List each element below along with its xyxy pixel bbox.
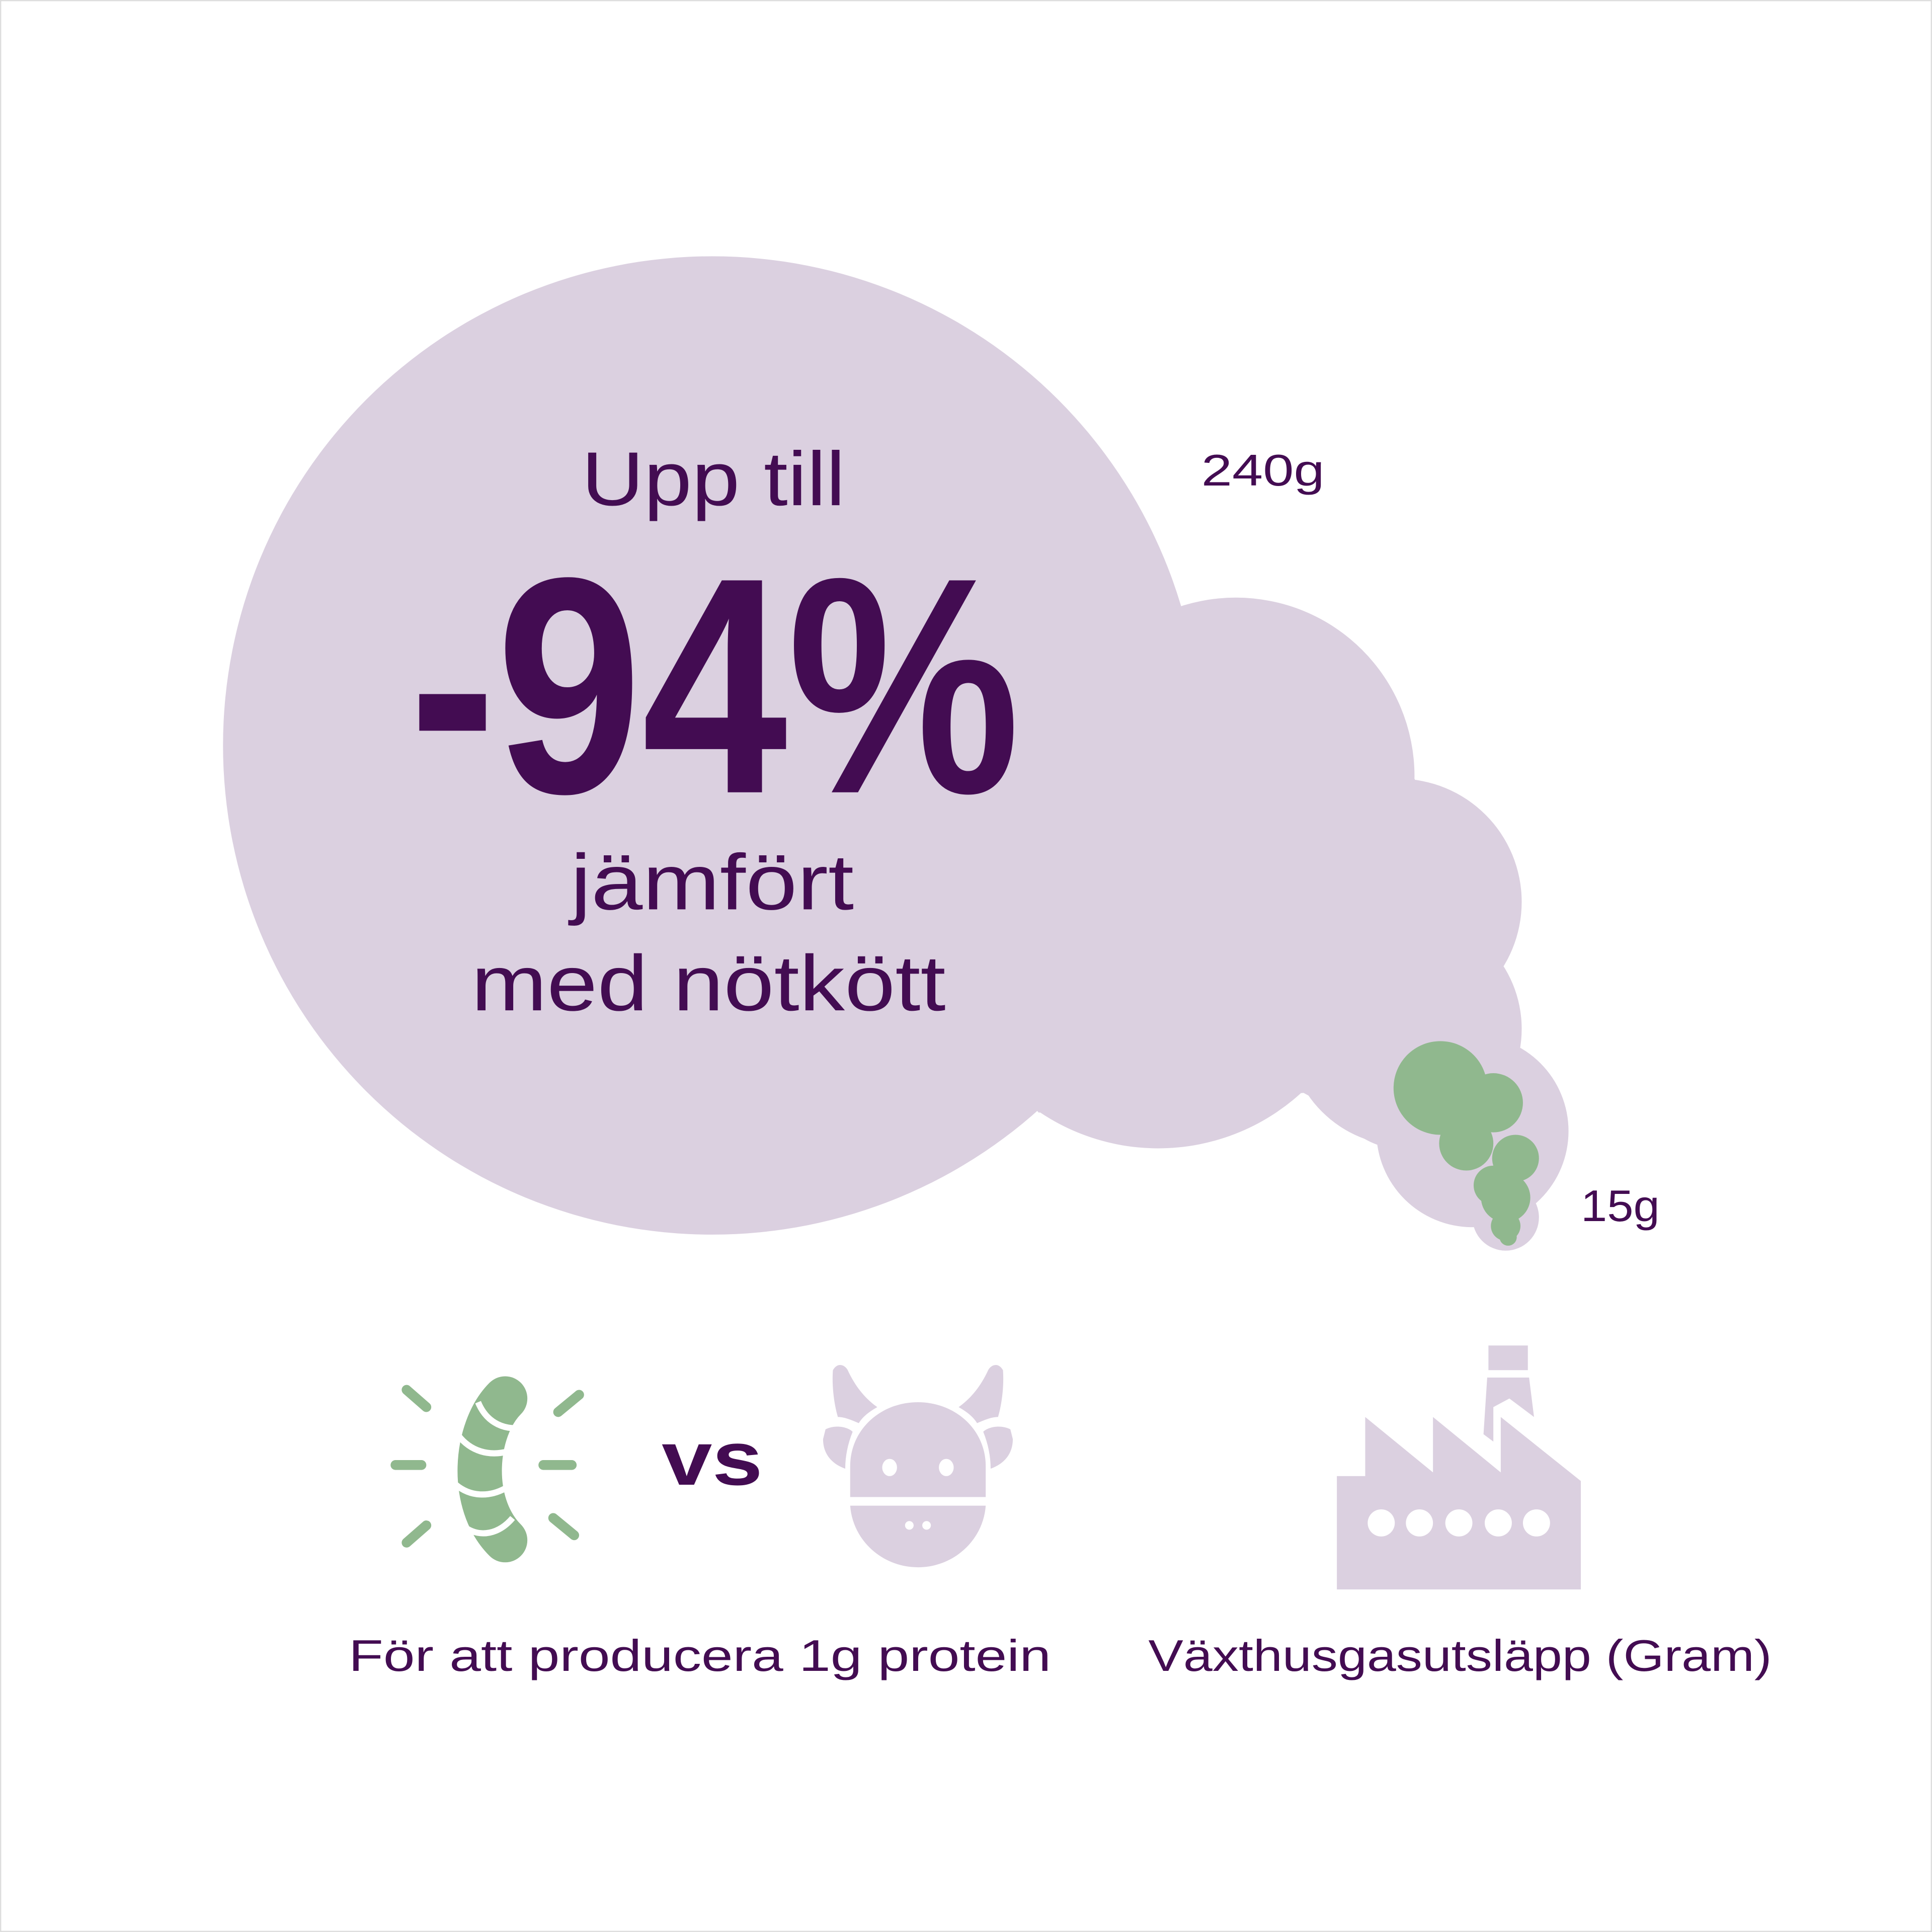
cloud shape: [223, 256, 1569, 1251]
caption: protein: För att producera 1g protein: [349, 1631, 1051, 1680]
green steam: [1394, 1041, 1539, 1246]
value 15g: 15g: [1581, 1181, 1660, 1231]
headline text: [409, 437, 1020, 1027]
headline text: jämfört: [568, 838, 854, 926]
caption: emissions: Växthusgasutsläpp (Gram): [1148, 1631, 1772, 1680]
icon: cow: [823, 1365, 1013, 1567]
headline text: -94%: [409, 514, 1020, 858]
icon: factory: [1337, 1345, 1581, 1589]
icon: larva: [395, 1390, 579, 1543]
value 240g: 240g: [1201, 445, 1325, 495]
vs: vs: [662, 1416, 763, 1501]
headline text: Upp till: [582, 437, 845, 522]
headline text: med nötkött: [471, 939, 946, 1027]
